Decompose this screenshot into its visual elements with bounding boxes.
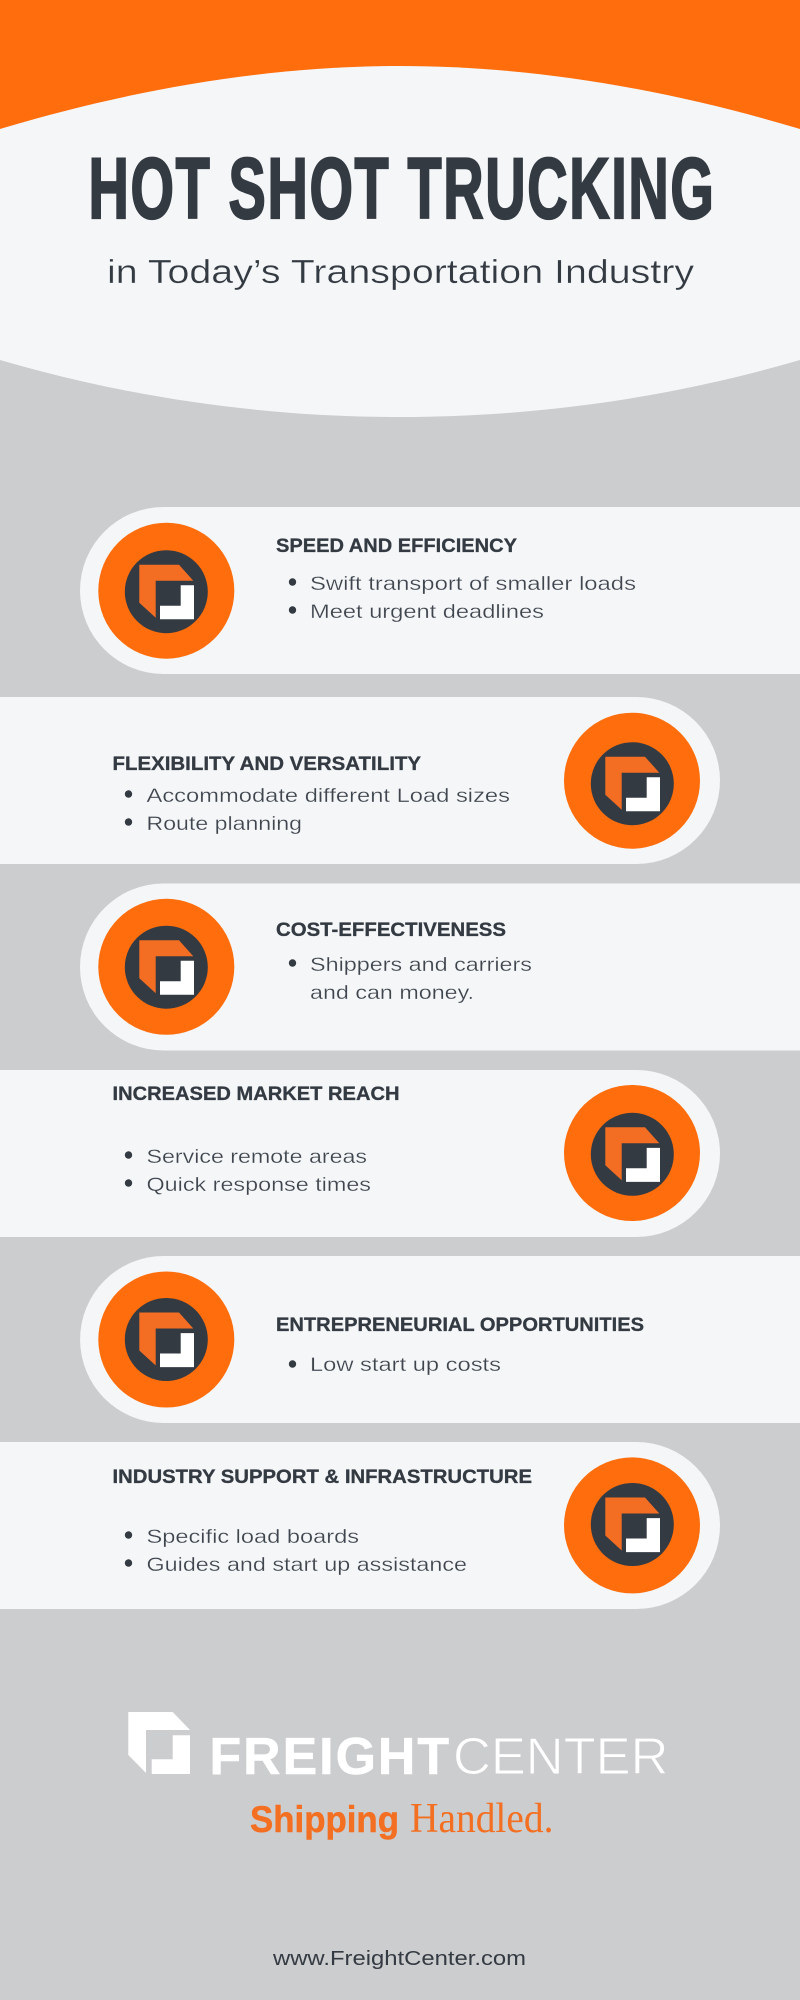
pill background	[80, 507, 800, 674]
heading: COST-EFFECTIVENESS	[276, 919, 506, 941]
tagline	[250, 1796, 554, 1842]
website url: www.FreightCenter.com	[272, 1948, 526, 1970]
panel: cost-effectiveness	[80, 884, 800, 1050]
tagline: Handled: Handled.	[410, 1796, 554, 1842]
bullet list	[289, 954, 532, 1004]
wordmark: Freight: FREIGHT	[210, 1728, 451, 1786]
bullet list: Specific load boards	[146, 1526, 359, 1548]
icon: logo badge	[564, 713, 700, 849]
bullet list	[125, 1526, 467, 1576]
bullet list: Route planning	[146, 813, 302, 835]
icon: logo badge	[98, 523, 234, 659]
heading: SPEED AND EFFICIENCY	[276, 535, 517, 557]
panel: entrepreneurial opportunities	[80, 1256, 800, 1423]
panel: industry support and infrastructure	[0, 1442, 720, 1609]
pill background	[80, 884, 800, 1050]
icon: logo badge	[98, 899, 234, 1035]
pill background	[80, 1256, 800, 1423]
icon: logo badge	[564, 1085, 700, 1221]
icon: logo badge	[98, 1272, 234, 1408]
panel: speed and efficiency	[80, 507, 800, 674]
heading: INCREASED MARKET REACH	[112, 1083, 400, 1105]
panel: flexibility and versatility	[0, 697, 720, 864]
pill background	[0, 1070, 720, 1237]
bullet list	[289, 573, 636, 623]
pill background	[0, 697, 720, 864]
bullet list: Meet urgent deadlines	[310, 601, 544, 623]
header lens shape	[0, 66, 800, 417]
bullet list: Accommodate different Load sizes	[146, 785, 510, 807]
footer logo: FreightCenter	[128, 1712, 669, 1786]
heading: ENTREPRENEURIAL OPPORTUNITIES	[276, 1314, 644, 1336]
bullet list: Service remote areas	[146, 1146, 367, 1168]
wordmark: Center: CENTER	[453, 1728, 668, 1786]
bullet list: Guides and start up assistance	[146, 1554, 467, 1576]
bullet list: Low start up costs	[310, 1354, 501, 1376]
heading: INDUSTRY SUPPORT & INFRASTRUCTURE	[112, 1466, 532, 1488]
bullet list	[125, 1146, 371, 1196]
bullet list: and can money.	[310, 982, 474, 1004]
icon: logo badge	[564, 1457, 700, 1593]
heading: FLEXIBILITY AND VERSATILITY	[112, 753, 421, 775]
tagline: Shipping: Shipping	[250, 1799, 399, 1840]
bullet list: Shippers and carriers	[310, 954, 532, 976]
bullet list: Quick response times	[146, 1174, 371, 1196]
panel: increased market reach	[0, 1070, 720, 1237]
bullet list: Swift transport of smaller loads	[310, 573, 636, 595]
orange top band	[0, 0, 800, 200]
bullet list	[125, 785, 510, 835]
subtitle: in Today’s Transportation Industry	[107, 253, 695, 290]
icon: FreightCenter mark	[128, 1712, 190, 1774]
header panel	[0, 66, 800, 417]
pill background	[0, 1442, 720, 1609]
